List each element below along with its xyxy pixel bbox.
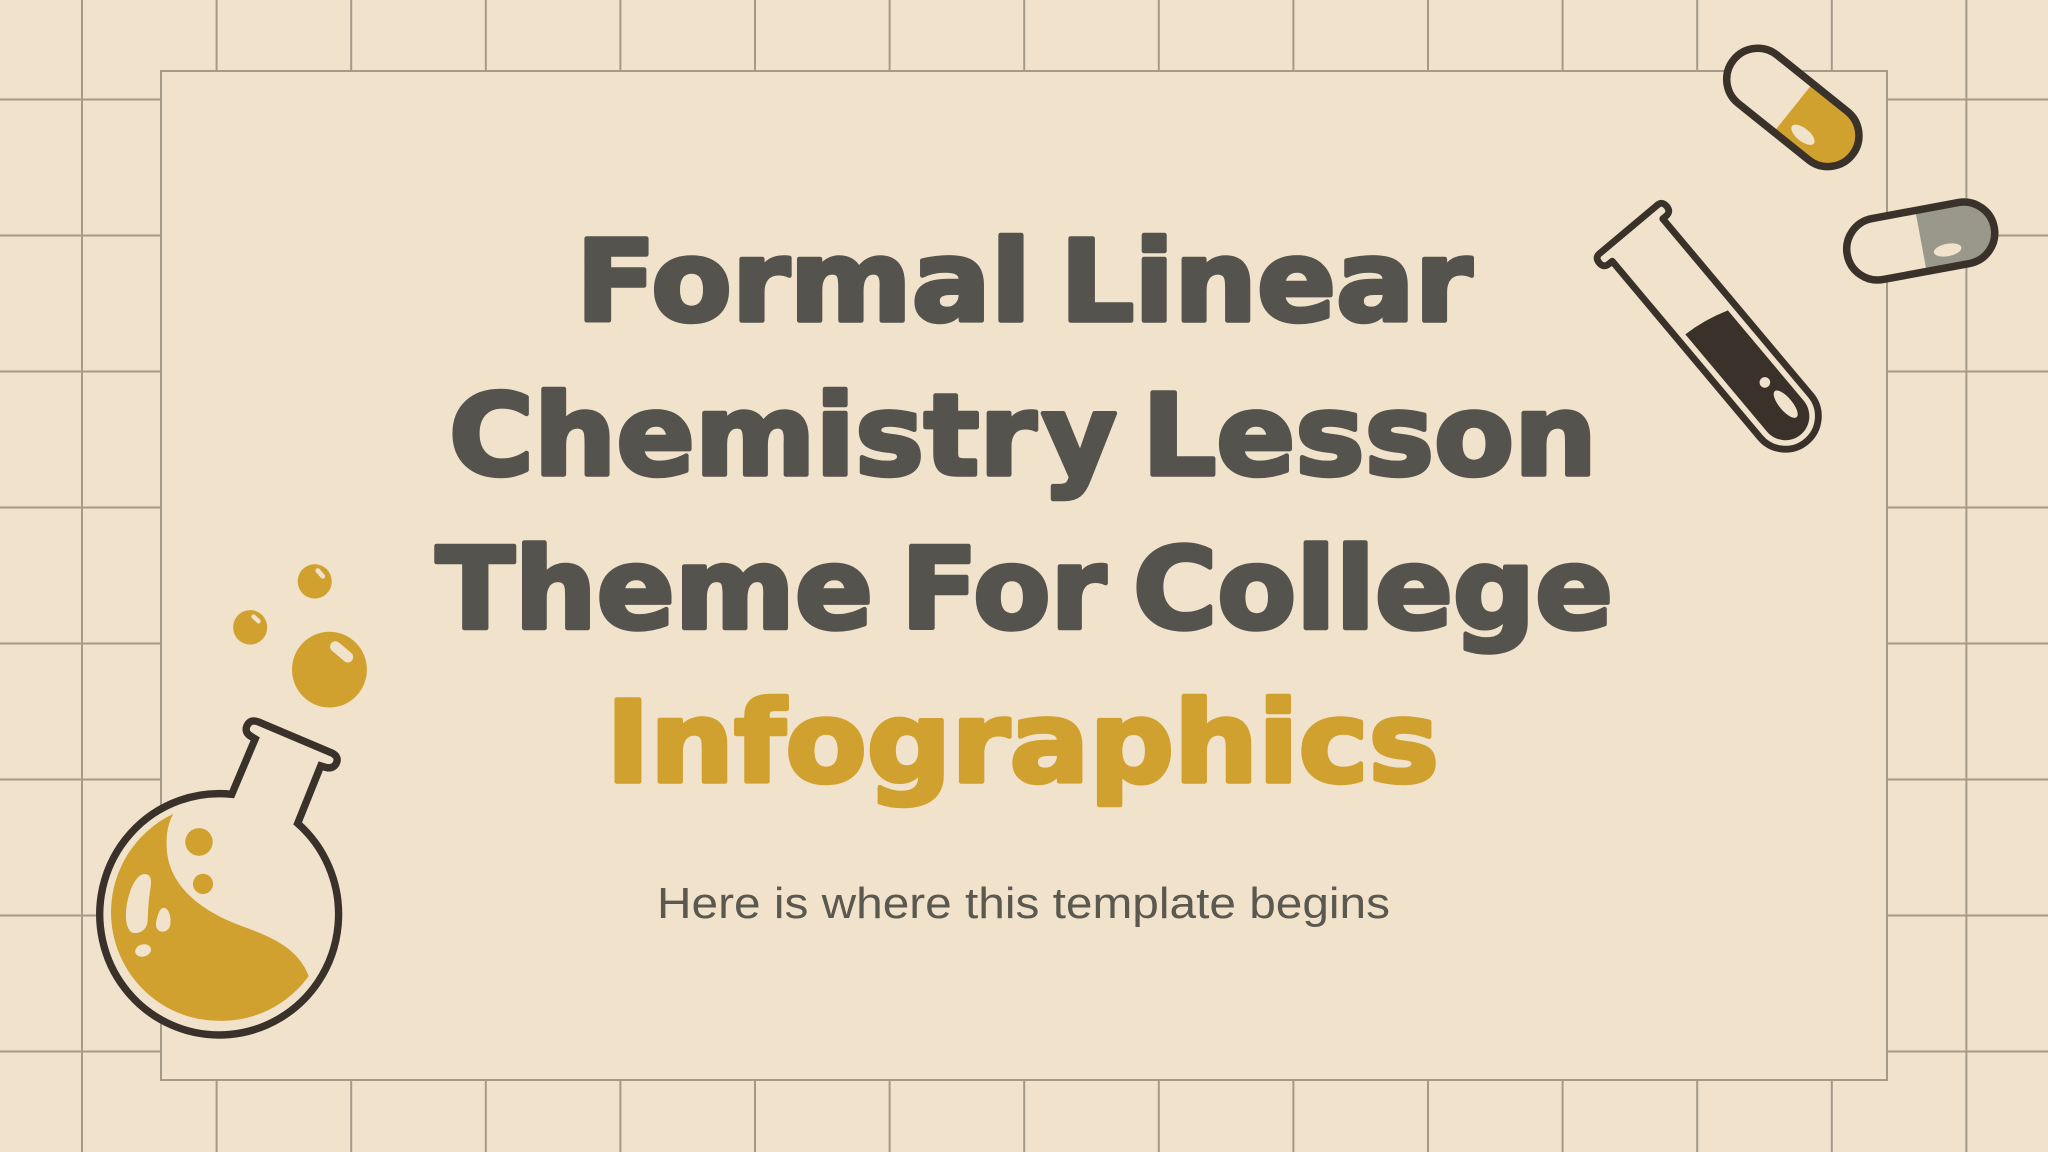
- liquid highlights: [126, 874, 171, 958]
- title line 2: Lesson: [1142, 372, 1597, 502]
- central panel: [161, 71, 1887, 1080]
- icon: gold pill: [1714, 36, 1872, 179]
- title line 3: For: [901, 525, 1106, 655]
- flask outline: [100, 721, 339, 1035]
- title line 1: Linear: [1060, 218, 1472, 348]
- title line 2: Chemistry: [449, 372, 1117, 502]
- title line 3: Theme: [436, 525, 873, 655]
- title line 3: [436, 525, 1613, 655]
- icon: grey pill: [1842, 197, 2000, 285]
- rising bubbles: [233, 564, 367, 707]
- flask liquid: [111, 814, 309, 1021]
- title line 1: [576, 218, 1472, 348]
- subtitle: Here is where this template begins: [657, 879, 1390, 928]
- title line 3: College: [1133, 525, 1613, 655]
- title: [436, 218, 1613, 808]
- icon: flask with bubbles: [100, 564, 367, 1035]
- flask inner bubbles: [185, 828, 213, 894]
- title line 2: [449, 372, 1597, 502]
- title line 1: Formal: [576, 218, 1031, 348]
- title line 4 highlighted: Infographics: [606, 678, 1439, 808]
- icon: test tube: [1595, 201, 1840, 470]
